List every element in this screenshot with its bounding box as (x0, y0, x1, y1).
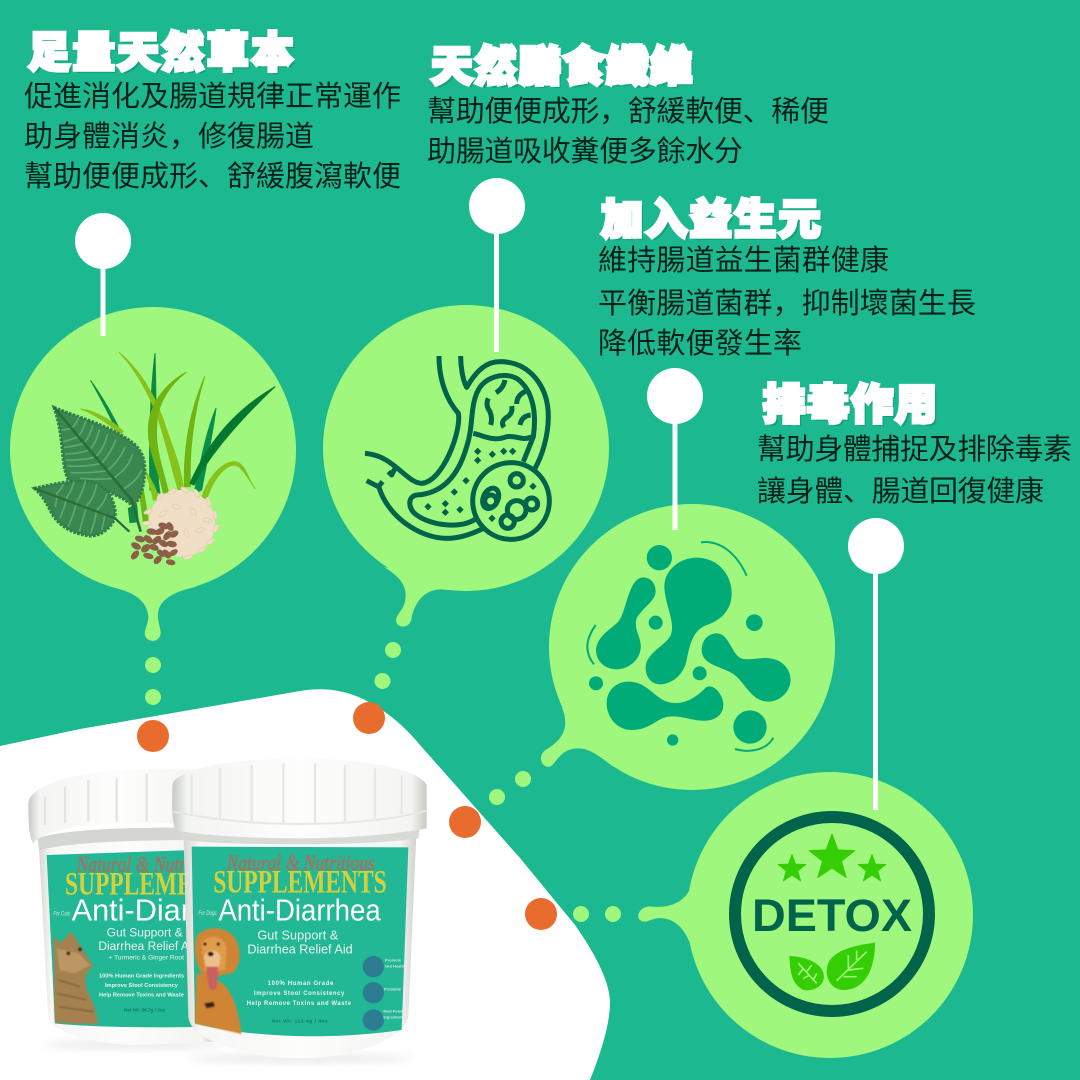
icon: leaves (789, 943, 875, 990)
text block: fibre benefits (427, 95, 829, 168)
icon: large leaf (54, 407, 145, 532)
text block: herbs benefits: 幫助便便成形、舒緩腹瀉軟便 (24, 160, 401, 193)
orange marker: detox (525, 898, 557, 930)
jar: cats: Diarrhea Relief Aid (98, 939, 198, 953)
icon: stars (778, 834, 886, 881)
pin: stomach (469, 178, 525, 352)
text block: fibre benefits: 助腸道吸收糞便多餘水分 (427, 135, 743, 168)
jar: cats (28, 769, 253, 1049)
jar: dogs: Prebiotic (384, 987, 402, 992)
text block: prebiotic benefits (598, 244, 976, 360)
bubble: prebiotics (541, 504, 835, 790)
orange marker: herbs (137, 720, 169, 752)
heading: dietary fibre: 天然膳食纖維 (431, 43, 694, 90)
icon: stomach particles (424, 448, 537, 522)
jar: dogs: Gut Health (385, 963, 406, 968)
icon: rice pile (142, 486, 220, 561)
DETOX label: DETOX (752, 890, 912, 941)
icon: grass blades (81, 353, 275, 523)
text block: detox benefits: 幫助身體捕捉及排除毒素 (757, 433, 1072, 466)
connector dots: stomach (374, 642, 401, 689)
pin: detox (848, 518, 904, 810)
jar: dogs (172, 758, 427, 1062)
heading: herbs: 足量天然草本 (28, 29, 296, 76)
text block: detox benefits (757, 433, 1072, 508)
jar: dogs: Natural & Nutritious (226, 850, 375, 875)
jar: dogs: Anti-Diarrhea (218, 894, 382, 928)
white product panel (0, 689, 610, 1080)
icon: small leaf (34, 481, 129, 536)
heading: detox: 排毒作用 (763, 381, 939, 428)
cat photo (53, 932, 98, 1024)
jar: dogs: 100% Human Grade (268, 981, 334, 987)
icon: detox ring (735, 817, 929, 1011)
text block: herbs benefits: 助身體消炎，修復腸道 (24, 120, 314, 153)
icon: flax seeds (130, 522, 179, 565)
jar: cats: Gut Support & (107, 926, 183, 940)
jar: cats: Anti-Diarrhea (72, 894, 253, 928)
jar: dogs: Real Food (383, 1009, 403, 1014)
jar: dogs: SUPPLEMENTS (213, 864, 387, 900)
dog photo (195, 928, 242, 1034)
text block: prebiotic benefits: 維持腸道益生菌群健康 (598, 244, 889, 277)
jar: dogs: Diarrhea Relief Aid (247, 942, 353, 956)
jar: dogs: For Dogs (198, 910, 217, 917)
jar: cats: Net Wt: 56.7g / 2oz (124, 1008, 166, 1013)
text block: prebiotic benefits: 降低軟便發生率 (598, 327, 802, 360)
text block: detox benefits: 讓身體、腸道回復健康 (757, 475, 1044, 508)
text block: prebiotic benefits: 平衡腸道菌群，抑制壞菌生長 (598, 287, 976, 320)
jar: dogs: Improve Stool Consistency (254, 991, 345, 997)
jar: cats: For Cats (53, 911, 70, 918)
heading: prebiotics: 加入益生元 (601, 196, 823, 243)
connector dots: herbs (145, 657, 161, 705)
jar: cats: + Turmeric & Ginger Root (108, 954, 184, 961)
jar: dogs: Promote (385, 958, 402, 963)
orange marker: prebiotics (449, 806, 481, 838)
jar: dogs: Help Remove Toxins and Waste (247, 1001, 352, 1007)
connector dots: prebiotics (489, 771, 531, 805)
jar: cats: Improve Stool Consistency (105, 983, 179, 989)
product jars (28, 758, 427, 1062)
bubble: herbs (10, 307, 296, 641)
text block: fibre benefits: 幫助便便成形，舒緩軟便、稀便 (427, 95, 829, 128)
jar: cats: SUPPLEMENTS (65, 866, 238, 902)
jar: dogs: Net Wt: 113.4g / 4oz (272, 1019, 328, 1025)
jar: cats: Natural & Nutritious (76, 852, 225, 877)
jar: cats: 100% Human Grade Ingredients (99, 973, 184, 979)
text block: herbs benefits (24, 80, 401, 193)
jar: cats: Help Remove Toxins and Waste (99, 993, 184, 999)
orange marker: stomach (353, 702, 385, 734)
icon: microbes (587, 542, 791, 751)
bubble: detox (638, 772, 973, 1058)
connector dots: detox (573, 906, 621, 922)
pin: prebiotics (647, 368, 703, 530)
text block: herbs benefits: 促進消化及腸道規律正常運作 (24, 80, 401, 113)
jar: dogs: Ingredients (383, 1014, 406, 1019)
icon: stomach (365, 356, 549, 539)
bubble: stomach (323, 305, 609, 627)
pin: herbs (75, 213, 131, 336)
jar: dogs: Gut Support & (257, 928, 339, 942)
